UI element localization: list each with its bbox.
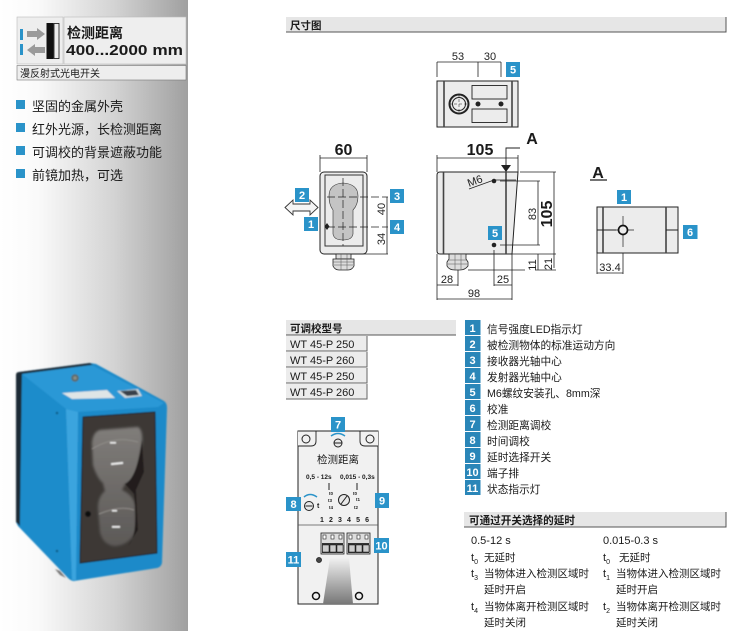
legend 11: 11	[467, 483, 478, 495]
badge 6: 6	[687, 227, 693, 239]
delay column: 0.5-12 s: 0.5-12 s	[471, 535, 511, 547]
delay column: 0.015-0.3 s: 2	[606, 608, 610, 615]
legend 3: 接收器光轴中心	[487, 355, 562, 368]
delay column: 0.015-0.3 s: 当物体离开检测区域时	[616, 600, 721, 613]
delay column: 0.015-0.3 s: 0	[606, 559, 610, 566]
legend 7: 检测距离调校	[487, 419, 551, 432]
dimensions 40 and 34	[352, 197, 388, 254]
delay column: 0.5-12 s: 延时开启	[484, 583, 526, 596]
mounting hole M6: M6	[466, 173, 484, 190]
badge 8: 8	[290, 499, 297, 511]
delay range labels: 0,5 - 12s	[306, 474, 332, 481]
delay column: 0.5-12 s: 当物体进入检测区域时	[484, 567, 589, 580]
drawing: top view	[437, 51, 520, 127]
badge 7	[331, 417, 345, 432]
badge 2: 2	[299, 190, 305, 202]
delay column: 0.015-0.3 s: 1	[606, 575, 610, 582]
feature 3: 可调校的背景遮蔽功能	[32, 145, 162, 160]
table: adjustable models	[286, 320, 456, 399]
terminal blocks	[321, 533, 370, 554]
delay column: 0.5-12 s	[471, 535, 589, 629]
badge 1: 1	[621, 192, 627, 204]
legend 5: 5	[469, 387, 476, 399]
dimensions 105, 83, 21 and 11: 11	[527, 259, 539, 271]
badge 3: 3	[394, 191, 400, 203]
row 3: WT 45-P 250	[290, 371, 354, 383]
arrow: standard motion direction	[285, 200, 318, 215]
delay column: 0.5-12 s: 当物体离开检测区域时	[484, 600, 589, 613]
legend 10: 端子排	[487, 467, 519, 480]
dimensions 53 and 30: 53	[452, 51, 464, 63]
dimensions 28, 25 and 98: 25	[497, 274, 509, 286]
feature 4: 前镜加热，可选	[32, 168, 123, 183]
badge 8	[286, 497, 301, 511]
legend 9: 延时选择开关	[487, 451, 551, 464]
legend 4: 4	[469, 371, 476, 383]
delay column: 0.015-0.3 s: 延时关闭	[616, 616, 658, 629]
drawing: side view	[437, 131, 556, 300]
badge 7: 7	[335, 420, 341, 432]
sensing range label: 检测距离	[67, 25, 123, 41]
delay column: 0.015-0.3 s: 0.015-0.3 s	[603, 535, 659, 547]
legend 5	[465, 384, 601, 400]
table heading	[286, 320, 456, 335]
legend 4: 发射器光轴中心	[487, 371, 562, 384]
sidebar background	[0, 0, 188, 631]
section heading: switch-selectable delays: 可通过开关选择的延时	[469, 514, 575, 527]
optics window	[329, 183, 358, 240]
section arrow A: A	[526, 131, 538, 148]
cable gland	[447, 254, 468, 270]
delay column: 0.5-12 s: 4	[474, 608, 478, 615]
delay column: 0.5-12 s: 无延时	[484, 552, 516, 564]
mounting hole M6	[466, 173, 516, 190]
row 1: WT 45-P 250	[290, 339, 354, 351]
control panel diagram	[286, 417, 389, 604]
row 2	[286, 352, 367, 367]
section heading: switch-selectable delays	[464, 512, 726, 527]
delay selector switch: t3	[328, 498, 332, 503]
delay column: 0.015-0.3 s: 无延时	[619, 552, 651, 564]
delay column: 0.5-12 s: 0	[474, 559, 478, 566]
sensor type label: 漫反射式光电开关	[20, 67, 100, 80]
legend list	[465, 320, 615, 496]
connector circle	[449, 94, 469, 114]
dimension 105 width: 105	[467, 142, 493, 159]
legend 8: 时间调校	[487, 435, 530, 448]
icon: sensing principle	[17, 17, 63, 64]
delay column: 0.015-0.3 s	[603, 535, 721, 629]
legend 6: 校准	[487, 403, 509, 416]
dimension 60: 60	[335, 142, 352, 159]
delay column: 0.5-12 s: t	[471, 601, 474, 613]
time trimmer: t	[317, 503, 320, 510]
legend 2: 被检测物体的标准运动方向	[487, 339, 615, 352]
label A: A	[592, 165, 604, 182]
delay range labels: 0,015 - 0,3s	[340, 474, 375, 481]
badge 11	[286, 552, 301, 567]
legend 2: 2	[469, 339, 476, 351]
mounting holes	[312, 592, 320, 600]
delay column: 0.5-12 s: 3	[474, 575, 478, 582]
feature list	[16, 99, 162, 183]
legend 3: 3	[469, 355, 476, 367]
dimensions 40 and 34: 34	[376, 233, 388, 245]
dimensions 105, 83, 21 and 11	[500, 172, 556, 271]
delay column: 0.015-0.3 s: 延时开启	[616, 583, 658, 596]
badge 10: 10	[375, 540, 388, 552]
cable gland	[333, 254, 354, 270]
sensing distance trimmer	[317, 434, 359, 466]
delay column: 0.5-12 s: t	[471, 552, 474, 564]
legend 6	[465, 400, 509, 416]
delay selector switch: t0	[329, 491, 333, 496]
product photo: blue photoelectric sensor	[16, 363, 167, 581]
section heading: dimensional drawing: 尺寸图	[290, 19, 322, 32]
delay selector switch: t1	[356, 497, 360, 502]
legend 4	[465, 368, 562, 384]
legend 2	[465, 336, 615, 352]
badge 4: 4	[394, 222, 401, 234]
legend 5: M6螺纹安装孔、8mm深	[487, 387, 601, 400]
section arrow A	[501, 131, 538, 172]
dimensions 105, 83, 21 and 11: 83	[527, 208, 539, 220]
legend 8: 8	[469, 435, 476, 447]
legend 9: 9	[469, 451, 476, 463]
drawing: section view A	[590, 165, 698, 274]
header: sensor type and sensing range	[17, 17, 186, 80]
badge 5: 5	[492, 228, 498, 240]
dimensions 28, 25 and 98: 98	[468, 288, 480, 300]
legend 1: 1	[469, 323, 476, 335]
dimensions 53 and 30	[437, 51, 501, 77]
badge 1: 1	[308, 219, 314, 231]
badge 5: 5	[510, 64, 516, 76]
delay range labels	[306, 474, 375, 490]
dimensions 105, 83, 21 and 11: 105	[539, 201, 556, 227]
legend 10: 10	[466, 467, 479, 479]
badge 5	[488, 226, 502, 240]
delay column: 0.015-0.3 s: t	[603, 552, 606, 564]
row 4	[286, 384, 367, 399]
status LED	[316, 557, 322, 563]
delay selector switch: t0	[353, 491, 357, 496]
row 4: WT 45-P 260	[290, 387, 354, 399]
dimensions 28, 25 and 98	[437, 250, 525, 300]
delay selector switch: t2	[354, 505, 358, 510]
legend 6: 6	[469, 403, 476, 415]
terminal numbers: 1 2 3 4 5 6	[320, 517, 369, 524]
legend 11: 状态指示灯	[487, 483, 541, 496]
legend 1	[465, 320, 583, 336]
dimensions 40 and 34: 40	[376, 203, 388, 215]
badge 9: 9	[379, 496, 385, 508]
row 2: WT 45-P 260	[290, 355, 354, 367]
delay column: 0.015-0.3 s: 当物体进入检测区域时	[616, 567, 721, 580]
row 3	[286, 368, 367, 383]
legend 7: 7	[469, 419, 476, 431]
drawing: front view	[285, 142, 404, 270]
delay column: 0.5-12 s: 延时关闭	[484, 616, 526, 629]
legend 11	[465, 480, 541, 496]
legend 9	[465, 448, 551, 464]
badge 11: 11	[288, 554, 299, 566]
dimensions 28, 25 and 98: 28	[441, 274, 453, 286]
sensing range label	[64, 17, 186, 64]
legend 8	[465, 432, 530, 448]
row 1	[286, 336, 367, 351]
badge 9	[375, 493, 389, 508]
legend 10	[465, 464, 519, 480]
dimension 105 width	[437, 142, 518, 172]
delay column: 0.015-0.3 s: t	[603, 568, 606, 580]
dimensions 105, 83, 21 and 11: 21	[543, 258, 555, 270]
badge 10	[374, 538, 389, 553]
sensing range label: 400...2000 mm	[66, 42, 183, 59]
delay selector switch	[328, 491, 360, 510]
feature 2: 红外光源，长检测距离	[32, 122, 162, 137]
section heading: dimensional drawing	[286, 17, 726, 32]
cable channel	[323, 558, 353, 604]
legend 1: 信号强度LED指示灯	[487, 323, 583, 336]
sensor type label	[17, 66, 186, 80]
sensing distance trimmer: 检测距离	[317, 453, 359, 466]
dimensions 53 and 30: 30	[484, 51, 496, 63]
delay column: 0.015-0.3 s: t	[603, 601, 606, 613]
delay column: 0.5-12 s: t	[471, 568, 474, 580]
time trimmer	[304, 494, 320, 510]
feature 1: 坚固的金属外壳	[32, 99, 123, 114]
legend 3	[465, 352, 562, 368]
delay selector switch: t4	[329, 505, 333, 510]
table heading: 可调校型号	[290, 322, 342, 335]
dimension 33.4: 33.4	[599, 262, 621, 274]
legend 7	[465, 416, 551, 432]
